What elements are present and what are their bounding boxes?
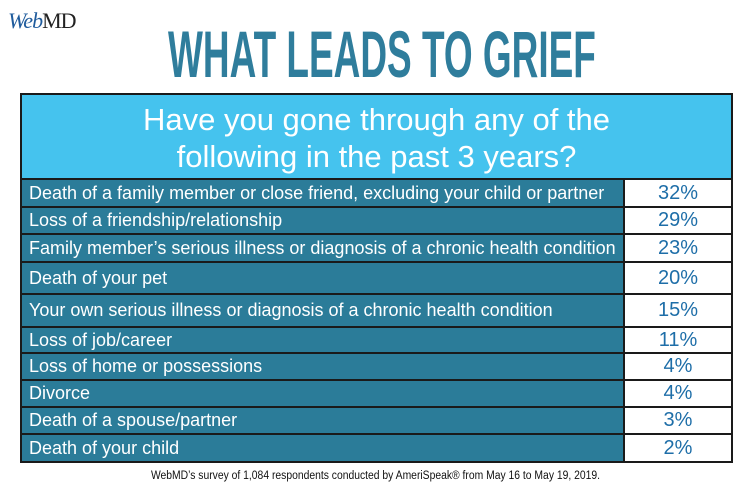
row 7 [22, 354, 731, 379]
row 7: 4% [664, 355, 692, 377]
title: WHAT LEADS TO GRIEF [168, 17, 596, 91]
row 1: 32% [658, 182, 698, 204]
row 5 [22, 295, 731, 326]
row 9 [22, 408, 731, 433]
table header question: following in the past 3 years? [177, 139, 576, 174]
table header question: Have you gone through any of the [143, 102, 610, 137]
row 6: Loss of job/career [29, 330, 172, 350]
row 9: Death of a spouse/partner [29, 410, 237, 430]
row 5: 15% [658, 299, 698, 321]
row 3 [22, 235, 731, 261]
row 2: 29% [658, 209, 698, 231]
row 1 [22, 180, 731, 206]
row 4: Death of your pet [29, 268, 167, 288]
row 8 [22, 381, 731, 406]
row 2: Loss of a friendship/relationship [29, 210, 282, 230]
table header question [22, 95, 731, 178]
row 1: Death of a family member or close friend, excluding your child or partner [29, 182, 604, 202]
row 4: 20% [658, 266, 698, 288]
row 8: Divorce [29, 383, 90, 403]
row 3: Family member’s serious illness or diagnosis of a chronic health condition [29, 238, 616, 258]
row 6 [22, 328, 731, 352]
logo: WebMD: WebMD [8, 8, 76, 33]
row 8: 4% [664, 382, 692, 404]
row 10: 2% [664, 436, 692, 458]
row 2 [22, 208, 731, 233]
row 5: Your own serious illness or diagnosis of a chronic health condition [29, 300, 553, 320]
row 6: 11% [659, 328, 697, 350]
row 3: 23% [658, 236, 698, 258]
row 10: Death of your child [29, 438, 179, 458]
row 7: Loss of home or possessions [29, 356, 262, 376]
row 9: 3% [664, 409, 692, 431]
table [20, 93, 733, 463]
row 10 [22, 435, 731, 461]
row 4 [22, 263, 731, 293]
footnote: WebMD’s survey of 1,084 respondents conducted by AmeriSpeak® from May 16 to May 19, 2019. [150, 470, 600, 482]
